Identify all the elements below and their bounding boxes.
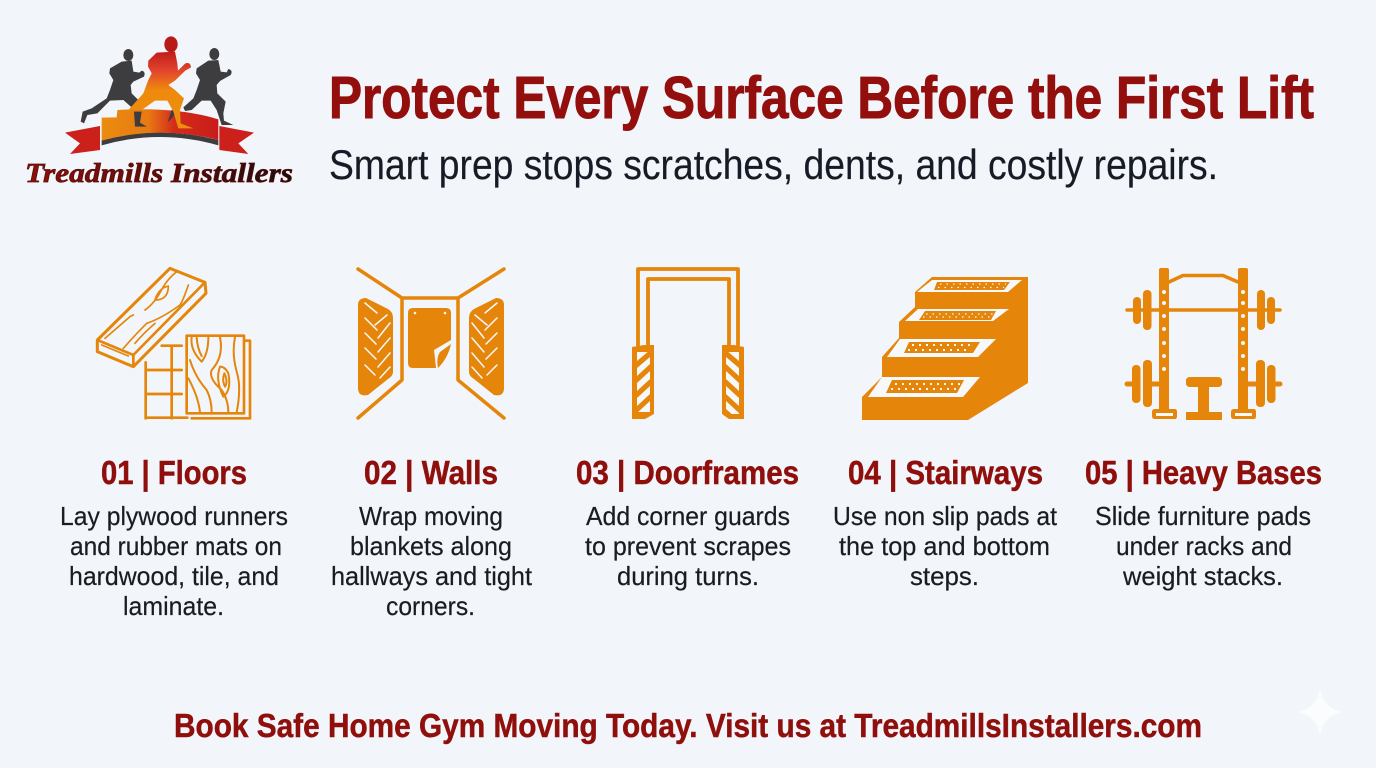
body 05 (1095, 501, 1311, 591)
tread 4 (868, 377, 980, 397)
body 05: under racks and (1116, 531, 1292, 561)
body 03: to prevent scrapes (585, 531, 791, 561)
step 05: Heavy Bases (1085, 455, 1322, 591)
right blanket (469, 298, 504, 395)
step 02: Walls (331, 455, 533, 621)
tread 3 (887, 339, 996, 357)
body 02 (331, 501, 533, 621)
body 01: and rubber mats on (70, 531, 282, 561)
icon: sparkle (1296, 688, 1344, 736)
logo: wordmark: Treadmills Installers (25, 158, 293, 188)
icon: heavy bases (1127, 268, 1280, 420)
body 01 (60, 501, 288, 621)
heading 05: 05 | Heavy Bases (1085, 455, 1322, 492)
body 04 (833, 501, 1058, 591)
call to action footer: Book Safe Home Gym Moving Today. Visit us at TreadmillsInstallers.com (174, 707, 1202, 744)
body 05: weight stacks. (1122, 561, 1283, 591)
body 01: laminate. (123, 591, 224, 621)
step 03: Doorframes (576, 455, 799, 591)
body 04: steps. (910, 561, 979, 591)
step 04: Stairways (833, 455, 1058, 591)
icon: floors (97, 268, 250, 418)
tread 2 (905, 309, 1009, 321)
logo: ribbon (65, 109, 254, 154)
logo: runners and ribbon artwork (65, 36, 254, 154)
icon: doorframes (632, 269, 744, 419)
body 03 (585, 501, 791, 591)
left corner guard (632, 345, 654, 419)
step 01: Floors (60, 455, 288, 621)
icon: walls (358, 269, 504, 418)
logo: Treadmills Installers (25, 36, 293, 188)
body 03: Add corner guards (586, 501, 790, 531)
tread 1 (917, 280, 1022, 292)
body 02: blankets along (350, 531, 512, 561)
body 04: Use non slip pads at (833, 501, 1058, 531)
heading 03: 03 | Doorframes (576, 455, 799, 492)
right corner guard (722, 345, 744, 419)
left blanket (358, 298, 393, 395)
heading 04: 04 | Stairways (848, 455, 1043, 492)
body 05: Slide furniture pads (1095, 501, 1311, 531)
body 02: hallways and tight (331, 561, 533, 591)
body 04: the top and bottom (839, 531, 1050, 561)
body 01: Lay plywood runners (60, 501, 288, 531)
body 02: corners. (386, 591, 475, 621)
icon: stairways (862, 277, 1028, 420)
center pad (408, 308, 451, 368)
logo: center runner (128, 36, 193, 128)
heading 01: 01 | Floors (101, 455, 247, 492)
heading 02: 02 | Walls (364, 455, 498, 492)
logo: right runner (183, 48, 233, 125)
logo: left runner (81, 49, 145, 123)
body 03: during turns. (617, 561, 759, 591)
body 01: hardwood, tile, and (69, 561, 279, 591)
body 02: Wrap moving (359, 501, 503, 531)
subtitle: Smart prep stops scratches, dents, and costly repairs. (329, 141, 1218, 188)
